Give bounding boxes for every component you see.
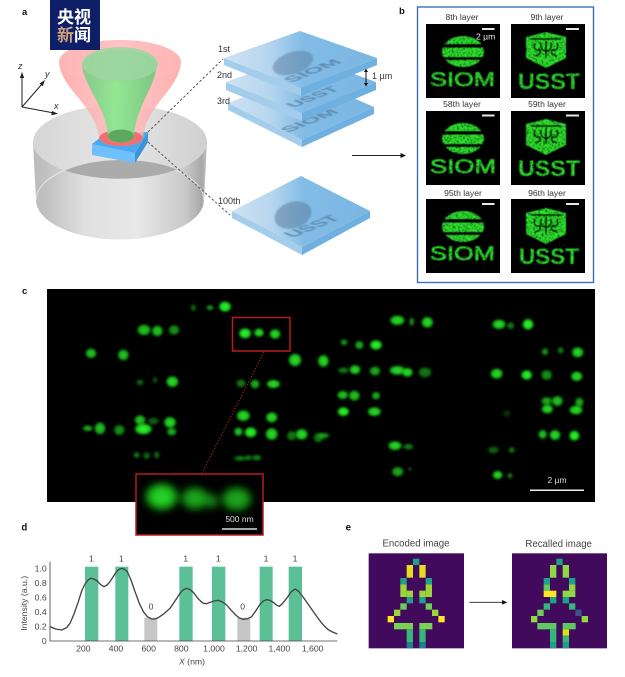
panel letter d: d bbox=[21, 522, 27, 533]
encoded image title: Encoded image bbox=[382, 538, 450, 549]
y axis labels: 0.4 bbox=[35, 607, 47, 617]
layer labels bbox=[217, 44, 392, 206]
x axis labels: 400 bbox=[109, 643, 123, 653]
red dotted connector bbox=[202, 352, 264, 473]
dashed guide lines bbox=[148, 59, 230, 215]
layer 1 plate bbox=[224, 31, 377, 96]
bit labels: 1 bbox=[89, 554, 94, 564]
y axis labels: 0.2 bbox=[35, 622, 47, 632]
green speckled USST images: USST bbox=[518, 69, 581, 94]
axes bbox=[17, 61, 59, 115]
green speckled SIOM images bbox=[430, 36, 496, 265]
layer labels: 3rd bbox=[217, 96, 230, 106]
x axis labels: 1,000 bbox=[203, 643, 225, 653]
image titles bbox=[443, 12, 566, 198]
layer labels: 1 µm bbox=[372, 71, 392, 81]
layer 2 plate: USST bbox=[282, 85, 344, 109]
panel letter c: c bbox=[22, 286, 27, 297]
image titles: 95th layer bbox=[444, 188, 482, 198]
bit labels bbox=[89, 554, 298, 612]
scale bars bbox=[482, 28, 579, 205]
layer 100 plate bbox=[232, 176, 370, 255]
x axis title: X (nm) bbox=[178, 657, 205, 667]
green speckled SIOM images: SIOM bbox=[430, 70, 495, 91]
y axis title: Intensity (a.u.) bbox=[19, 576, 29, 631]
panel letter b: b bbox=[399, 6, 405, 17]
y axis labels: 0 bbox=[42, 636, 47, 646]
zero bars bbox=[144, 618, 250, 641]
layer 3 plate: SIOM bbox=[276, 107, 344, 134]
layer labels: 1st bbox=[218, 44, 231, 54]
green speckled SIOM images: SIOM bbox=[430, 244, 495, 265]
inset magnified view bbox=[136, 474, 263, 535]
1 µm double arrow bbox=[364, 68, 368, 86]
bit labels: 1 bbox=[264, 554, 269, 564]
bit labels: 0 bbox=[149, 602, 154, 612]
green speckled USST images: USST bbox=[518, 156, 581, 181]
bit labels: 0 bbox=[240, 602, 245, 612]
layer 100 plate: USST bbox=[279, 213, 346, 239]
black image tiles bbox=[426, 24, 585, 273]
arrow a to b bbox=[352, 153, 406, 158]
x axis labels: 1,600 bbox=[302, 643, 324, 653]
panel letter e: e bbox=[346, 523, 352, 534]
bit labels: 1 bbox=[183, 554, 188, 564]
layer 1 plate: SIOM bbox=[279, 57, 347, 84]
axes bbox=[50, 562, 337, 641]
laser cones bbox=[59, 40, 181, 146]
axes: z bbox=[17, 61, 23, 71]
image titles: 9th layer bbox=[531, 12, 564, 22]
layer 3 plate bbox=[228, 75, 374, 147]
y axis labels: 0.8 bbox=[35, 578, 47, 588]
recalled image title: Recalled image bbox=[525, 539, 592, 550]
x axis labels: 1,200 bbox=[236, 643, 258, 653]
inset magnified view: 500 nm bbox=[225, 514, 254, 524]
main scale bar bbox=[530, 475, 584, 491]
panel e: encoded and recalled images bbox=[346, 523, 607, 648]
panel d: intensity chart bbox=[19, 522, 337, 667]
image titles: 58th layer bbox=[443, 99, 481, 109]
main scale bar: 2 µm bbox=[547, 475, 567, 485]
glass cylinder bbox=[33, 105, 207, 240]
panel a: optical setup and stacked layers bbox=[17, 7, 406, 255]
x axis labels: 200 bbox=[76, 643, 91, 653]
layer labels: 100th bbox=[218, 196, 241, 206]
bit labels: 1 bbox=[216, 554, 221, 564]
axes: x bbox=[53, 101, 59, 111]
recalled image pixel grid bbox=[512, 553, 607, 648]
code bars bbox=[85, 567, 302, 641]
logo: CCTV news bbox=[50, 0, 100, 50]
sample chip bbox=[92, 132, 148, 163]
bit labels: 1 bbox=[293, 554, 298, 564]
y axis labels: 0.6 bbox=[35, 593, 47, 603]
axes: y bbox=[44, 69, 50, 79]
x axis labels: 1,400 bbox=[268, 643, 290, 653]
panel b: layer readouts bbox=[399, 6, 594, 282]
blue frame bbox=[418, 7, 594, 282]
panel letter a: a bbox=[22, 7, 28, 18]
y axis labels: 1.0 bbox=[35, 563, 47, 573]
y axis labels bbox=[35, 563, 47, 646]
panel c: microscopy image bbox=[22, 286, 595, 535]
image titles: 59th layer bbox=[528, 99, 566, 109]
image titles: 8th layer bbox=[446, 12, 479, 22]
layer labels: 2nd bbox=[217, 70, 232, 80]
encoded image pixel grid bbox=[369, 553, 464, 648]
black image field bbox=[47, 289, 595, 502]
green speckled SIOM images: SIOM bbox=[430, 157, 496, 178]
intensity curve bbox=[50, 568, 337, 634]
x axis labels: 600 bbox=[141, 643, 156, 653]
green speckled USST images bbox=[518, 32, 581, 269]
logo: CCTV news: 央视 bbox=[57, 3, 91, 28]
scale label: 2 µm bbox=[476, 32, 495, 42]
x axis labels bbox=[76, 643, 324, 653]
layer 2 plate bbox=[226, 55, 376, 121]
fluorescent spots right half bbox=[317, 315, 584, 480]
logo: CCTV news: 新闻 bbox=[57, 21, 91, 46]
green speckled USST images: USST bbox=[519, 244, 580, 269]
x axis labels: 800 bbox=[174, 643, 189, 653]
image titles: 96th layer bbox=[528, 188, 566, 198]
fluorescent spots left half bbox=[82, 301, 324, 461]
red selection box bbox=[232, 318, 290, 351]
arrow bbox=[469, 600, 507, 605]
bit labels: 1 bbox=[119, 554, 124, 564]
